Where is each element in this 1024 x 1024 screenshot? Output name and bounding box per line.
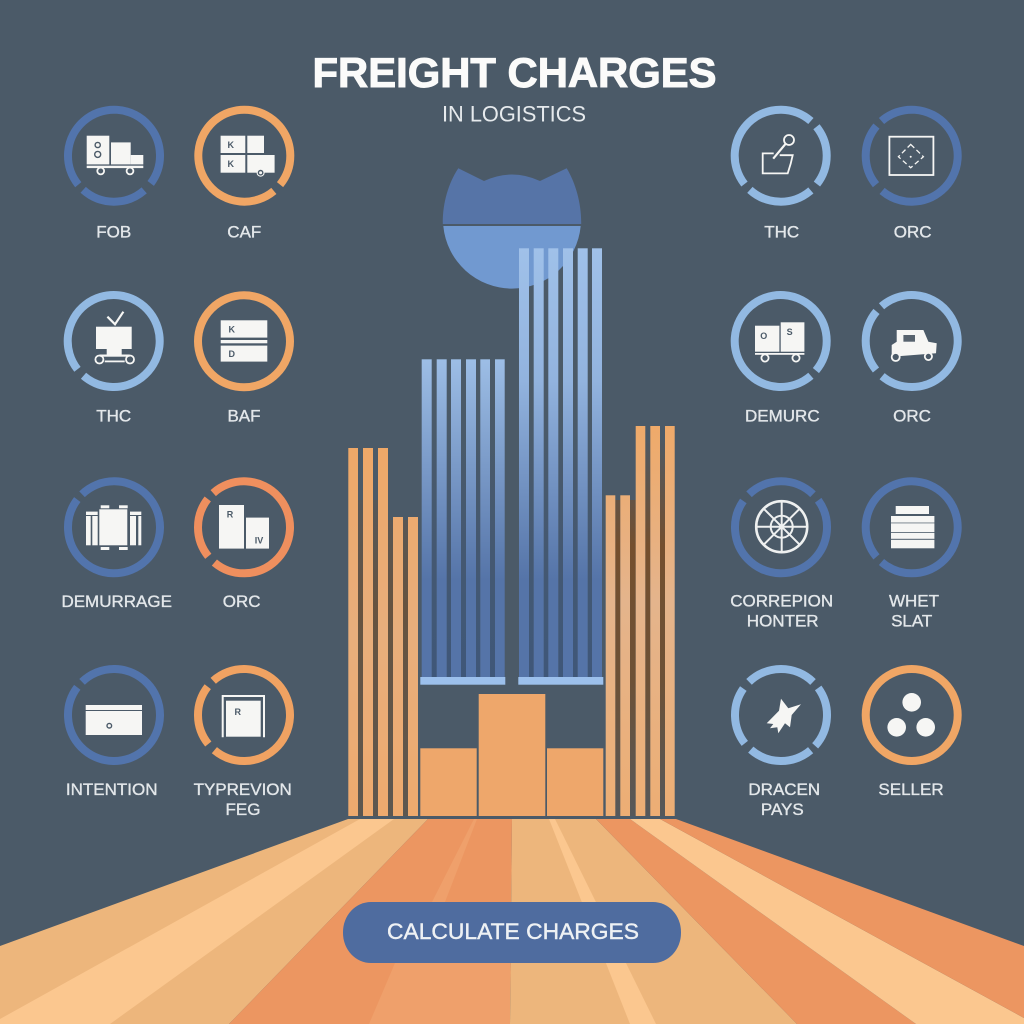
icon: framed target: [889, 137, 933, 175]
item: CORREPION HONTER: [716, 462, 846, 630]
label: TYPREVION: [194, 780, 292, 799]
label: THC: [764, 222, 799, 242]
label: THC: [96, 406, 131, 426]
label: SLAT: [891, 612, 932, 630]
ring: [198, 295, 290, 387]
label: WHET: [889, 592, 939, 610]
ring: [179, 91, 309, 221]
bar chart: orange columns right: [606, 426, 675, 816]
bar chart: orange columns left: [348, 448, 418, 816]
item: WHET SLAT: [847, 462, 977, 630]
label: CORREPION: [730, 592, 833, 610]
label: DEMURRAGE: [61, 592, 172, 611]
icon: two boxes: [219, 505, 269, 549]
icon: star arrow: [767, 699, 801, 733]
label: PAYS: [761, 800, 804, 819]
item: FOB: [49, 91, 179, 242]
ring: [847, 91, 977, 221]
icon: cartons: K: [228, 159, 235, 169]
title: FREIGHT CHARGES: [312, 49, 716, 96]
ring: [866, 669, 958, 761]
label: CAF: [227, 222, 261, 242]
icon: stacked slats: [891, 506, 934, 548]
bar chart: orange podium blocks: [420, 694, 603, 816]
ring: [716, 276, 846, 406]
label: ORC: [893, 406, 931, 426]
item: ORC right second: [847, 276, 977, 426]
icon: stacked panels: D: [228, 349, 235, 359]
ring: [49, 650, 179, 780]
label: SELLER: [878, 780, 944, 799]
icon: two boxes: R: [227, 509, 234, 519]
label: ORC: [223, 592, 261, 611]
button: calculate charges: [343, 902, 681, 963]
item: ORC left: [179, 462, 309, 611]
ring: [49, 276, 178, 406]
ring: [716, 462, 846, 592]
icon: two boxes: IV: [255, 535, 263, 545]
ring: [49, 91, 179, 221]
label: BAF: [227, 406, 261, 426]
label: ORC: [894, 222, 932, 242]
subtitle: IN LOGISTICS: [442, 102, 586, 126]
ring: [716, 650, 846, 780]
label: FOB: [96, 222, 131, 242]
icon: cargo cart: O: [760, 331, 767, 341]
item: THC right: [716, 91, 845, 242]
icon: cartons: K: [228, 140, 235, 150]
item: ORC right top: [847, 91, 977, 242]
icon: cargo cart: [755, 322, 804, 362]
bar chart: blue columns: [420, 248, 603, 685]
item: INTENTION: [49, 650, 179, 799]
label: DRACEN: [748, 780, 820, 799]
ring: [179, 650, 309, 780]
label: HONTER: [747, 612, 819, 630]
ring: [179, 462, 309, 592]
ring: [49, 462, 179, 592]
icon: framed door: [223, 696, 264, 737]
item: DEMURC: [716, 276, 846, 426]
icon: check and cart: [95, 312, 134, 364]
ring: [716, 91, 845, 220]
icon: three dots: [887, 693, 935, 737]
floor with perspective stripes: [0, 819, 1024, 1024]
icon: stacked panels: K: [228, 324, 235, 334]
icon: stacked panels: [221, 320, 267, 362]
item: TYPREVION FEG: [179, 650, 309, 819]
icon: container top view: [86, 505, 141, 550]
icon: framed door: R: [234, 707, 241, 717]
item: BAF: [198, 295, 290, 426]
icon: small car: [892, 330, 937, 361]
icon: ship wheel: [756, 501, 807, 552]
button: calculate charges: CALCULATE CHARGES: [387, 919, 639, 944]
ring: [847, 462, 977, 592]
item: DEMURRAGE: [49, 462, 179, 611]
item: THC left: [49, 276, 178, 426]
label: DEMURC: [745, 406, 820, 426]
icon: cargo cart: S: [787, 327, 793, 337]
moon shape with cat ears: [443, 168, 581, 289]
ring: [847, 276, 977, 406]
label: INTENTION: [66, 780, 158, 799]
icon: drawer: [86, 705, 142, 735]
label: FEG: [226, 800, 260, 819]
icon: truck: [87, 136, 143, 174]
item: CAF: [179, 91, 309, 242]
icon: cartons: [221, 136, 275, 177]
item: DRACEN PAYS: [716, 650, 846, 819]
icon: lever and tray: [763, 135, 794, 173]
item: SELLER: [866, 669, 958, 799]
